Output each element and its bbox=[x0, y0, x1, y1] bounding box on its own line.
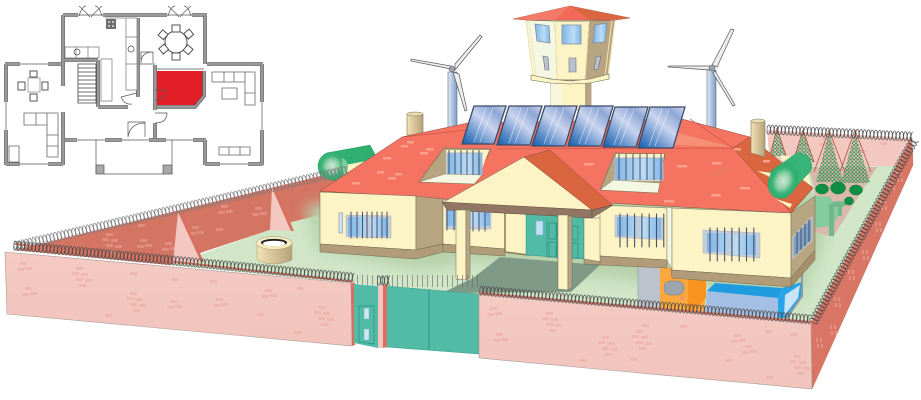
hob and sinks bbox=[106, 19, 116, 29]
left wall buttresses bbox=[173, 187, 294, 263]
wall end strip bbox=[351, 283, 355, 346]
side window bbox=[793, 217, 812, 258]
solar panel 2 bbox=[497, 106, 542, 145]
porch columns bbox=[96, 165, 104, 174]
solar panel 1 bbox=[462, 106, 506, 144]
gate spikes bbox=[354, 275, 480, 287]
front left razor wire bbox=[13, 240, 354, 283]
fascia return bbox=[592, 205, 613, 218]
right wing window bbox=[703, 228, 760, 261]
back wall inner face bbox=[767, 130, 912, 167]
highlighted red room bbox=[157, 71, 204, 105]
main gate bbox=[386, 286, 479, 354]
back razor wire bbox=[766, 124, 913, 142]
right wing wall bbox=[672, 208, 791, 278]
front door bbox=[526, 213, 584, 259]
tower roof bbox=[513, 6, 630, 20]
wicket gate bbox=[354, 284, 378, 348]
main roof bbox=[320, 119, 813, 213]
left wall inner face bbox=[15, 170, 345, 265]
centre window bbox=[446, 205, 491, 231]
corner pilaster bbox=[667, 207, 672, 270]
wall coping bbox=[15, 244, 811, 322]
porch recess bbox=[505, 213, 528, 255]
garden bed bbox=[808, 167, 877, 237]
orange boiler bbox=[660, 268, 705, 311]
fascia bbox=[442, 202, 592, 218]
stairs bbox=[78, 64, 96, 103]
grey store bbox=[638, 266, 662, 308]
right wing side wall bbox=[791, 196, 815, 278]
shrubs bbox=[815, 196, 840, 228]
left porch column bbox=[456, 210, 470, 280]
centre plinth bbox=[443, 244, 607, 265]
left wall bricks bbox=[102, 205, 267, 253]
left wing plinth bbox=[320, 244, 443, 259]
roof tile highlights bbox=[352, 141, 770, 202]
left wind turbine bbox=[411, 35, 482, 131]
tower bbox=[513, 6, 630, 110]
well bbox=[256, 236, 292, 264]
left sofa bbox=[9, 113, 58, 162]
bean tripods bbox=[770, 130, 870, 183]
cabbages bbox=[816, 182, 862, 205]
tripod poles bbox=[770, 128, 871, 172]
right wing plinth bbox=[671, 270, 791, 287]
back roof light slope bbox=[673, 133, 732, 147]
right sofa and tables bbox=[212, 72, 255, 155]
ground shadow around house bbox=[305, 190, 825, 300]
right wing side plinth bbox=[791, 250, 815, 287]
left chimney bbox=[407, 112, 423, 135]
garden ground bbox=[170, 166, 897, 323]
wicket razor wire bbox=[377, 275, 390, 286]
roof ridge lines bbox=[402, 119, 733, 149]
right wind turbine bbox=[668, 29, 735, 130]
front right wall bricks bbox=[487, 307, 810, 379]
tower centre face bbox=[555, 21, 589, 80]
tower lower windows bbox=[543, 56, 601, 72]
small palms bbox=[828, 201, 848, 236]
tower corner trim bbox=[526, 20, 615, 80]
solar panel 4 bbox=[568, 106, 613, 146]
front right wall bbox=[479, 294, 812, 389]
thick outer walls bbox=[5, 15, 263, 165]
gate post bbox=[378, 284, 387, 348]
utility wing: plant room and water tank bbox=[638, 266, 802, 319]
tower left face bbox=[526, 20, 557, 80]
house bbox=[318, 6, 815, 319]
tower right face bbox=[585, 20, 615, 80]
left wing wall bbox=[320, 192, 416, 250]
kitchen units bbox=[65, 18, 137, 101]
right centre plinth bbox=[600, 256, 667, 268]
floor plan bbox=[5, 6, 263, 174]
right porch wall panel bbox=[584, 218, 602, 262]
gable rake bbox=[524, 150, 612, 210]
left wing side wall bbox=[416, 196, 443, 250]
hip dormers and right tank bbox=[757, 153, 812, 208]
front right razor wire bbox=[479, 285, 811, 325]
centre wall bbox=[443, 200, 607, 257]
back wall bricks bbox=[800, 137, 887, 153]
right roof hip bbox=[733, 137, 813, 213]
porch shadow bbox=[442, 257, 600, 293]
solar panel 5 bbox=[603, 107, 648, 147]
dining table and chairs bbox=[158, 25, 194, 60]
right razor wire bbox=[808, 136, 919, 325]
pediment bbox=[442, 150, 613, 218]
right side wall bricks bbox=[816, 172, 903, 348]
doors bbox=[79, 6, 191, 137]
right porch column bbox=[558, 215, 572, 290]
tower upper windows bbox=[535, 23, 607, 44]
front left wall bbox=[5, 252, 352, 346]
gable face bbox=[442, 157, 592, 210]
left dormer bbox=[419, 148, 491, 184]
front left wall bricks bbox=[17, 262, 334, 334]
right side wall bbox=[811, 138, 913, 389]
water tank bbox=[705, 291, 778, 319]
solar panels bbox=[462, 106, 685, 148]
solar panel 6 bbox=[638, 107, 685, 148]
left razor wire bbox=[13, 165, 349, 252]
tower shaft bbox=[551, 80, 591, 110]
right chimney bbox=[751, 119, 765, 157]
vegetable garden bbox=[770, 128, 877, 237]
left tank bbox=[318, 145, 378, 190]
right dormer bbox=[600, 153, 665, 193]
right centre window bbox=[615, 214, 664, 247]
right centre wall bbox=[600, 205, 667, 260]
living room table and chairs bbox=[18, 71, 48, 101]
thin interior and window lines bbox=[6, 15, 262, 174]
solar panel 3 bbox=[532, 106, 577, 146]
tower ledge bbox=[531, 74, 609, 84]
left wing window bbox=[339, 212, 391, 238]
